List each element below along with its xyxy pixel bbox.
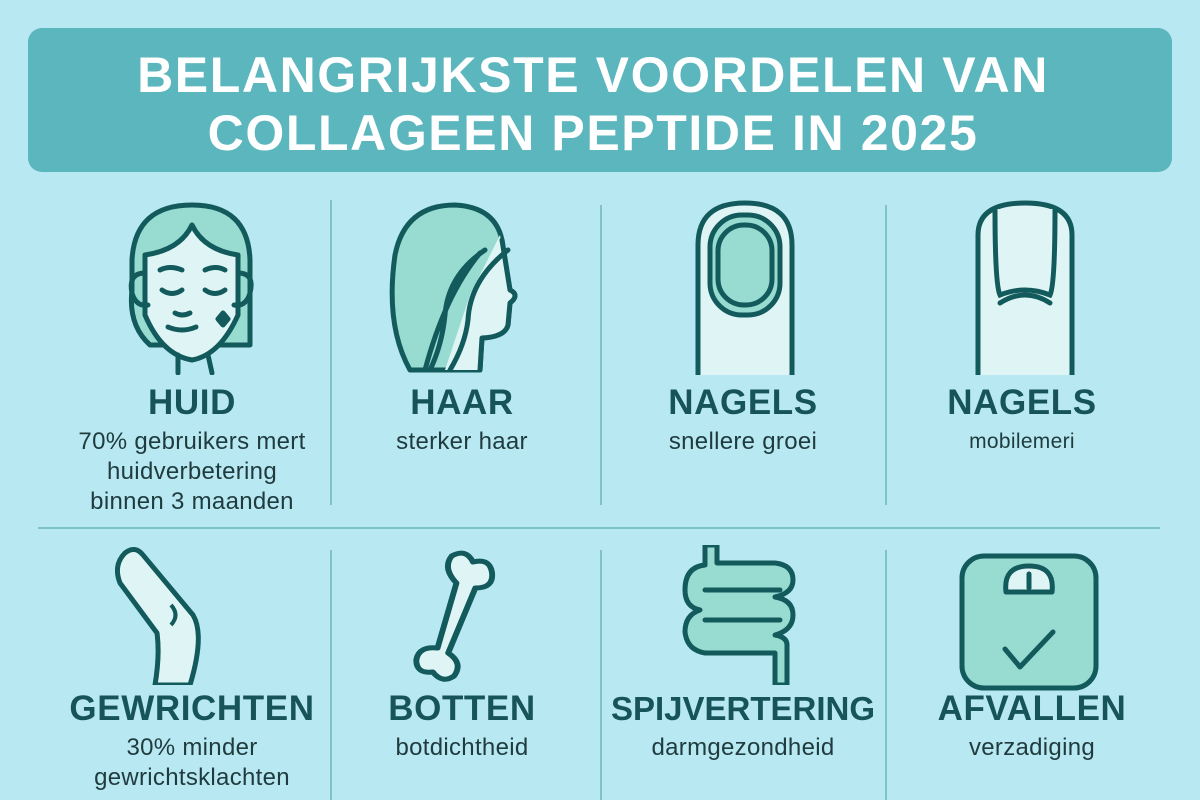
cell: gewrichten: gewrichtsklachten (94, 764, 290, 791)
title banner (28, 28, 1172, 172)
icon: nail (696, 200, 794, 375)
cell: huid: huidverbetering (107, 458, 277, 485)
cell: nagels: snellere groei (669, 428, 817, 455)
icon: face (128, 202, 254, 375)
cell: huid: 70% gebruikers mert (78, 428, 306, 455)
cell: huid: binnen 3 maanden (90, 488, 294, 515)
cell: nagels: NAGELS (668, 383, 818, 422)
cell: huid: HUID (148, 383, 236, 422)
cell: afvallen: AFVALLEN (938, 689, 1126, 728)
icon: bone (413, 550, 496, 682)
cell: spijvertering (611, 690, 875, 761)
cell: afvallen: verzadiging (969, 734, 1095, 761)
cell: spijvertering: SPIJVERTERING (611, 690, 875, 727)
cell: botten: botdichtheid (395, 734, 529, 761)
cell: nagels 2 (947, 383, 1097, 453)
cell: haar: sterker haar (396, 428, 528, 455)
icon: intestine (682, 545, 796, 685)
cell: nagels 2: mobilemeri (969, 430, 1075, 453)
title: BELANGRIJKSTE VOORDELEN VAN (137, 47, 1049, 103)
icon: nail 2 (976, 200, 1074, 375)
cell: spijvertering: darmgezondheid (652, 734, 834, 761)
cell: huid (78, 383, 306, 515)
title: COLLAGEEN PEPTIDE IN 2025 (208, 105, 978, 161)
cell: gewrichten (69, 689, 315, 791)
cell: gewrichten: GEWRICHTEN (69, 689, 315, 728)
cell: afvallen (938, 689, 1126, 761)
cell: haar: HAAR (410, 383, 514, 422)
icon: hair profile (390, 202, 518, 372)
cell: gewrichten: 30% minder (126, 734, 258, 761)
icon: knee (115, 547, 201, 685)
cell: nagels (668, 383, 818, 455)
title (137, 47, 1049, 161)
icon: scale (960, 554, 1098, 690)
cell: nagels 2: NAGELS (947, 383, 1097, 422)
cell: haar (396, 383, 528, 455)
cell: botten: BOTTEN (388, 689, 536, 728)
cell: botten (388, 689, 536, 761)
